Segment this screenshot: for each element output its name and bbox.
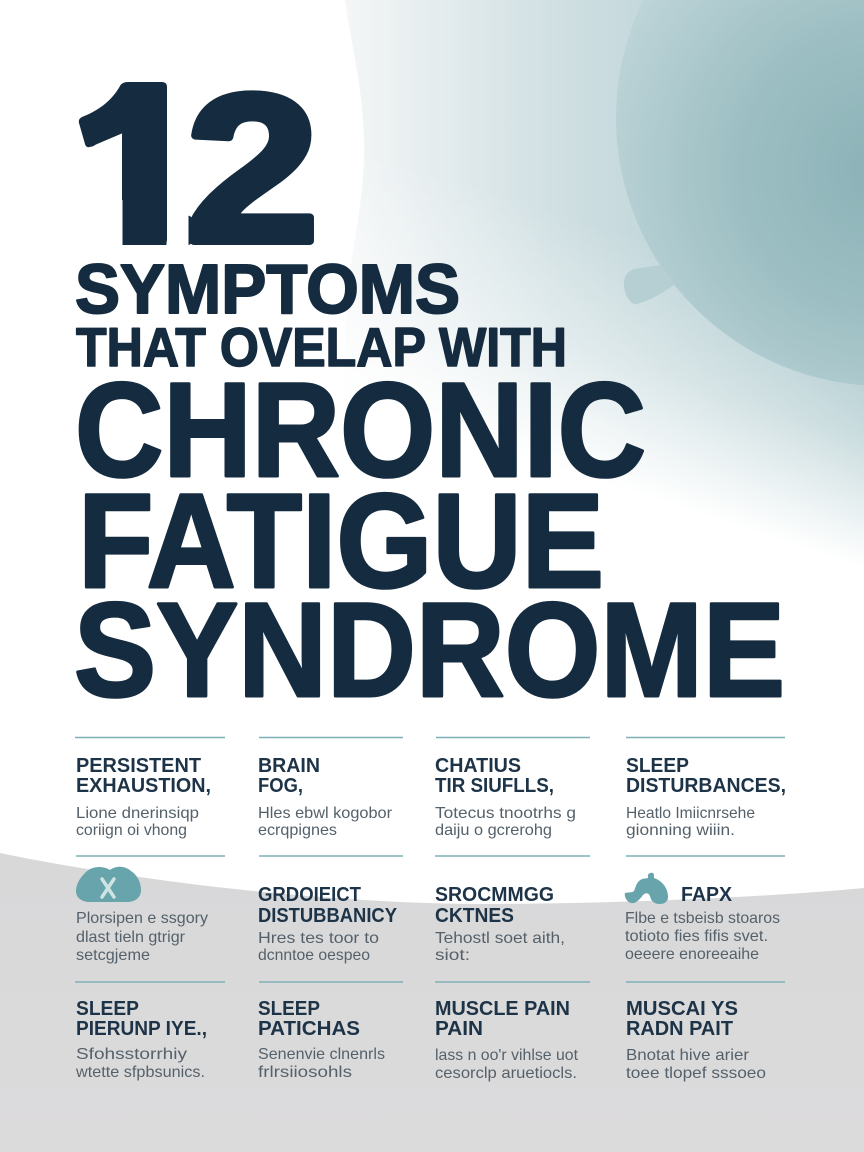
symptom: persistent exhaustion: coriign oi vhong bbox=[76, 822, 187, 839]
symptom: srocmmgg: SROCMMGG bbox=[435, 883, 554, 906]
symptom: srocmmgg: siot: bbox=[435, 947, 470, 964]
symptom: brain fog bbox=[258, 738, 403, 839]
symptom: sleep pierunp bbox=[75, 982, 225, 1081]
symptom: icon card one: Plorsipen e ssgory bbox=[76, 910, 208, 927]
symptom: persistent exhaustion: PERSISTENT bbox=[76, 754, 201, 777]
symptom: muscai ys: RADN PAIT bbox=[626, 1017, 733, 1040]
symptom: brain fog: BRAIN bbox=[258, 754, 320, 777]
symptom: sleep pierunp: PIERUNP IYE., bbox=[76, 1017, 207, 1040]
symptom: chatius: Totecus tnootrhs g bbox=[435, 805, 576, 822]
symptom: chatius: TIR SIUFLLS, bbox=[435, 774, 554, 797]
symptom: brain fog: Hles ebwl kogobor bbox=[258, 805, 393, 822]
number 12: 1 bbox=[77, 51, 194, 286]
symptom: chatius: daiju o gcrerohg bbox=[435, 822, 552, 839]
symptom: sleep disturbances: SLEEP bbox=[626, 754, 689, 777]
symptom: muscai ys: Bnotat hive arier bbox=[626, 1047, 750, 1064]
symptom: srocmmgg bbox=[435, 856, 590, 964]
symptom: persistent exhaustion: EXHAUSTION, bbox=[76, 774, 211, 797]
subtitle: symptoms: SYMPTOMS bbox=[75, 250, 460, 328]
symptom: muscle pain: lass n oo'r vihlse uot bbox=[435, 1047, 579, 1064]
small teal tab bbox=[624, 265, 675, 304]
number 12 bbox=[70, 51, 319, 286]
background wash bbox=[345, 0, 864, 548]
symptom: chatius bbox=[435, 738, 590, 839]
symptom: sleep pierunp: SLEEP bbox=[76, 997, 139, 1020]
symptom: chatius: CHATIUS bbox=[435, 754, 521, 777]
icon: stomach bbox=[625, 873, 668, 904]
symptom: persistent exhaustion bbox=[75, 738, 225, 839]
symptom: sleep pierunp: Sfohsstorrhiy bbox=[76, 1046, 187, 1063]
symptom: srocmmgg: CKTNES bbox=[435, 904, 514, 927]
symptom: muscle pain: cesorclp aruetiocls. bbox=[435, 1065, 577, 1082]
symptom: srocmmgg: Tehostl soet aith, bbox=[435, 930, 565, 947]
symptom: fapx bbox=[625, 856, 785, 963]
icon: lungs with cross bbox=[76, 867, 141, 902]
symptom: sleep patichas bbox=[258, 982, 403, 1081]
symptom: sleep pierunp: wtette sfpbsunics. bbox=[75, 1064, 205, 1081]
symptom: gut disturbance: DISTUBBANICY bbox=[258, 904, 397, 927]
symptom: icon card one: dlast tieln gtrigr bbox=[76, 929, 186, 946]
symptom: fapx: FAPX bbox=[681, 883, 732, 906]
symptom: sleep disturbances: DISTURBANCES, bbox=[626, 774, 786, 797]
symptom: muscle pain: MUSCLE PAIN bbox=[435, 997, 570, 1020]
symptom: gut disturbance: dcnntoe oespeo bbox=[258, 947, 370, 964]
symptom: brain fog: ecrqpignes bbox=[258, 822, 337, 839]
symptom: sleep disturbances: Heatlo Imiicnrsehe bbox=[626, 805, 755, 822]
symptom: gut disturbance: GRDOIEICT bbox=[258, 883, 361, 906]
subtitle: that overlap with: THAT OVELAP WITH bbox=[76, 316, 567, 378]
symptom: fapx: totioto fies fifis svet. bbox=[625, 928, 768, 945]
symptom: sleep patichas: SLEEP bbox=[258, 997, 320, 1020]
symptom: muscai ys bbox=[626, 982, 785, 1082]
large teal circle bbox=[616, 0, 864, 386]
symptom: muscai ys: MUSCAI YS bbox=[626, 997, 738, 1020]
title bbox=[70, 51, 785, 725]
symptom: gut disturbance bbox=[258, 856, 403, 964]
symptom: brain fog: FOG, bbox=[258, 774, 303, 797]
symptom: sleep patichas: frlrsiiosohls bbox=[258, 1064, 352, 1081]
symptom: fapx: Flbe e tsbeisb stoaros bbox=[625, 910, 780, 927]
symptom: muscai ys: toee tlopef sssoeo bbox=[626, 1065, 766, 1082]
symptom: muscle pain: PAIN bbox=[435, 1017, 483, 1040]
title: chronic: CHRONIC bbox=[75, 356, 646, 505]
symptom: icon card one bbox=[76, 856, 225, 964]
symptom: persistent exhaustion: Lione dnerinsiqp bbox=[76, 805, 199, 822]
symptom: sleep disturbances bbox=[626, 738, 786, 839]
symptom: gut disturbance: Hres tes toor to bbox=[258, 930, 379, 947]
symptom: muscle pain bbox=[435, 982, 590, 1082]
number 12: 2 bbox=[186, 51, 319, 286]
symptom: fapx: oeeere enoreeaihe bbox=[625, 946, 759, 963]
grey lower wave bbox=[0, 853, 864, 1152]
symptom: sleep patichas: Senenvie clnenrls bbox=[258, 1046, 385, 1063]
title: fatigue: FATIGUE bbox=[78, 467, 604, 616]
symptom: icon card one: setcgjeme bbox=[76, 947, 150, 964]
symptom: sleep disturbances: gionning wiiin. bbox=[626, 822, 735, 839]
symptom: sleep patichas: PATICHAS bbox=[258, 1017, 360, 1040]
title: syndrome: SYNDROME bbox=[74, 576, 785, 725]
